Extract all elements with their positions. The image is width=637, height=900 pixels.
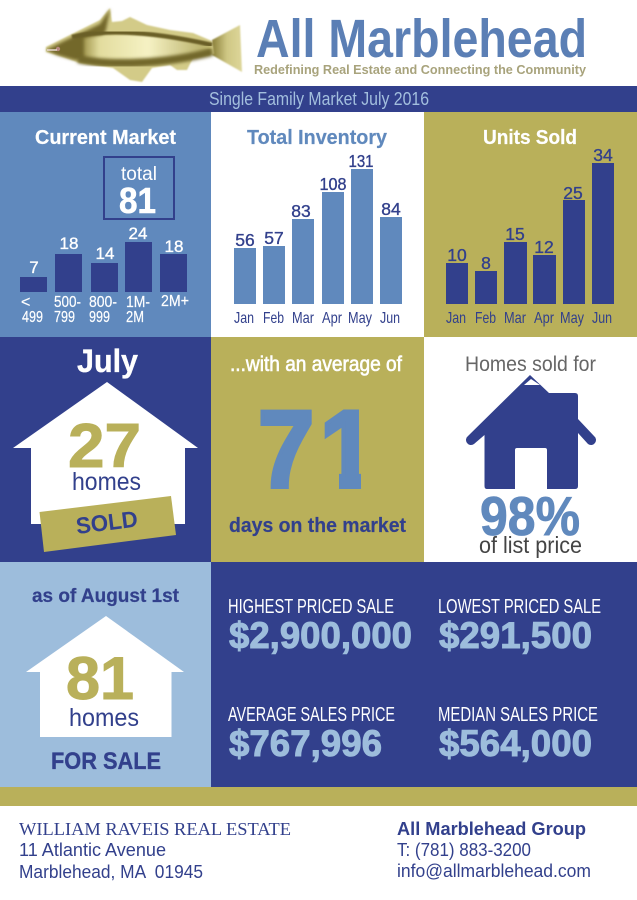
- bar chart: units sold by month: 12: [534, 237, 554, 257]
- bar chart: inventory by month: Mar: [292, 310, 315, 327]
- bar chart: units sold by month: Feb: [475, 310, 496, 327]
- footer: group contact: T: (781) 883-3200: [397, 840, 531, 860]
- bar chart: units sold by month: May: [560, 310, 584, 327]
- icon: white house: [13, 382, 198, 524]
- panel: days on market: [211, 337, 424, 562]
- banner title: Single Family Market July 2016: [209, 89, 429, 109]
- bar chart: units sold by month: Jun: [592, 310, 612, 327]
- bar chart: price ranges: 499: [22, 309, 43, 326]
- panel: units sold: [424, 112, 637, 337]
- footer: office address: 11 Atlantic Avenue: [19, 840, 166, 860]
- bar chart: price ranges: 799: [54, 309, 75, 326]
- bar chart: inventory by month: 84: [381, 199, 401, 219]
- stat: average sales price: [228, 703, 395, 764]
- bar chart: units sold by month: 34: [593, 145, 613, 165]
- bar chart: price ranges: 18: [60, 234, 78, 253]
- logo wordmark: All Marblehead: [256, 9, 587, 69]
- text: with an average of: ...with an average of: [230, 353, 402, 376]
- bar chart: inventory by month: 131: [348, 151, 374, 171]
- bar chart: units sold by month: 10: [447, 245, 467, 265]
- sold tag: [40, 496, 176, 552]
- bar chart: price ranges: 7: [29, 258, 39, 277]
- bar chart: units sold by month: 25: [563, 183, 583, 203]
- heading: july: July: [77, 343, 138, 379]
- bar chart: inventory by month: May: [348, 310, 372, 327]
- stat: highest priced sale: HIGHEST PRICED SALE: [228, 595, 394, 618]
- bar chart: inventory by month: 56: [235, 230, 255, 250]
- sold tag: SOLD: [74, 506, 139, 539]
- bar chart: price ranges: 24: [129, 224, 147, 243]
- bar chart: units sold by month: Apr: [534, 310, 555, 327]
- callout: total 81: [104, 157, 174, 221]
- heading: units sold: Units Sold: [483, 127, 577, 149]
- panel: july homes sold: [0, 337, 211, 562]
- panel: total inventory: [211, 112, 424, 337]
- stat: median sales price: $564,000: [439, 722, 592, 764]
- stat: median sales price: [438, 703, 598, 764]
- bar chart: units sold by month: Mar: [504, 310, 527, 327]
- bar chart: price ranges: 14: [96, 244, 114, 263]
- text: as of august 1st: as of August 1st: [32, 586, 180, 607]
- bar chart: price ranges: 1M-: [126, 294, 150, 311]
- bar chart: inventory by month: Jun: [380, 310, 400, 327]
- stat: lowest priced sale: $291,500: [439, 614, 592, 656]
- bar chart: inventory by month: [234, 151, 402, 327]
- stat: average sales price: $767,996: [229, 722, 382, 764]
- bar chart: inventory by month: 83: [291, 201, 311, 221]
- bar chart: price ranges: 2M+: [161, 293, 189, 310]
- bar chart: inventory by month: Feb: [263, 310, 284, 327]
- header logo: [46, 8, 587, 82]
- bar chart: price ranges: 800-: [89, 294, 117, 311]
- footer: office address: [19, 819, 291, 882]
- heading: current market: Current Market: [35, 127, 176, 149]
- bar chart: inventory by month: Apr: [322, 310, 343, 327]
- label: homes: homes: [69, 704, 139, 732]
- number: 81: 81: [66, 645, 134, 712]
- panel: sale prices: [211, 562, 637, 787]
- text: of list price: of list price: [479, 532, 582, 558]
- stat: highest priced sale: $2,900,000: [229, 614, 412, 656]
- bar chart: inventory by month: 108: [320, 174, 346, 194]
- footer: group contact: [397, 819, 591, 881]
- bar chart: inventory by month: Jan: [234, 310, 254, 327]
- label: for sale: FOR SALE: [51, 748, 161, 775]
- bar chart: price ranges: <: [21, 294, 30, 311]
- bar chart: price ranges: 18: [165, 237, 183, 256]
- icon: navy house: [466, 375, 596, 489]
- text: homes sold for: Homes sold for: [465, 353, 596, 376]
- text: days on the market: days on the market: [229, 515, 406, 537]
- heading: total inventory: Total Inventory: [247, 127, 388, 149]
- stat: lowest priced sale: [438, 595, 601, 656]
- stat: highest priced sale: [228, 595, 412, 656]
- footer: office address: Marblehead, MA 01945: [19, 862, 203, 882]
- label: homes: homes: [72, 468, 141, 496]
- footer: office address: WILLIAM RAVEIS REAL ESTATE: [19, 819, 291, 839]
- stat: average sales price: AVERAGE SALES PRICE: [228, 703, 395, 726]
- panel: current market: [0, 112, 211, 337]
- footer: group contact: info@allmarblehead.com: [397, 861, 591, 881]
- footer: group contact: All Marblehead Group: [397, 819, 586, 839]
- bar chart: inventory by month: 57: [264, 228, 284, 248]
- icon: white house: [26, 616, 184, 737]
- bar chart: units sold by month: 15: [505, 224, 525, 244]
- bar chart: price ranges: 999: [89, 309, 110, 326]
- panel: homes for sale: [0, 562, 211, 787]
- number: 71: 71: [258, 388, 376, 511]
- bar chart: price ranges: 2M: [126, 309, 144, 326]
- gold footer band: [0, 787, 637, 806]
- callout: total 81: 81: [119, 180, 156, 221]
- number: 27: 27: [68, 412, 141, 481]
- bar chart: price ranges: [20, 224, 189, 326]
- bar chart: units sold by month: Jan: [446, 310, 466, 327]
- logo tagline: Redefining Real Estate and Connecting the Community: [254, 62, 587, 77]
- number: 98 percent: 98%: [480, 485, 580, 547]
- banner: [0, 86, 637, 112]
- bar chart: units sold by month: [446, 145, 614, 327]
- bar chart: price ranges: 500-: [54, 294, 81, 311]
- callout: total 81: total: [121, 164, 157, 185]
- panel: list price: [424, 337, 637, 562]
- bar chart: units sold by month: 8: [481, 253, 491, 273]
- icon: golden fish: [46, 8, 242, 82]
